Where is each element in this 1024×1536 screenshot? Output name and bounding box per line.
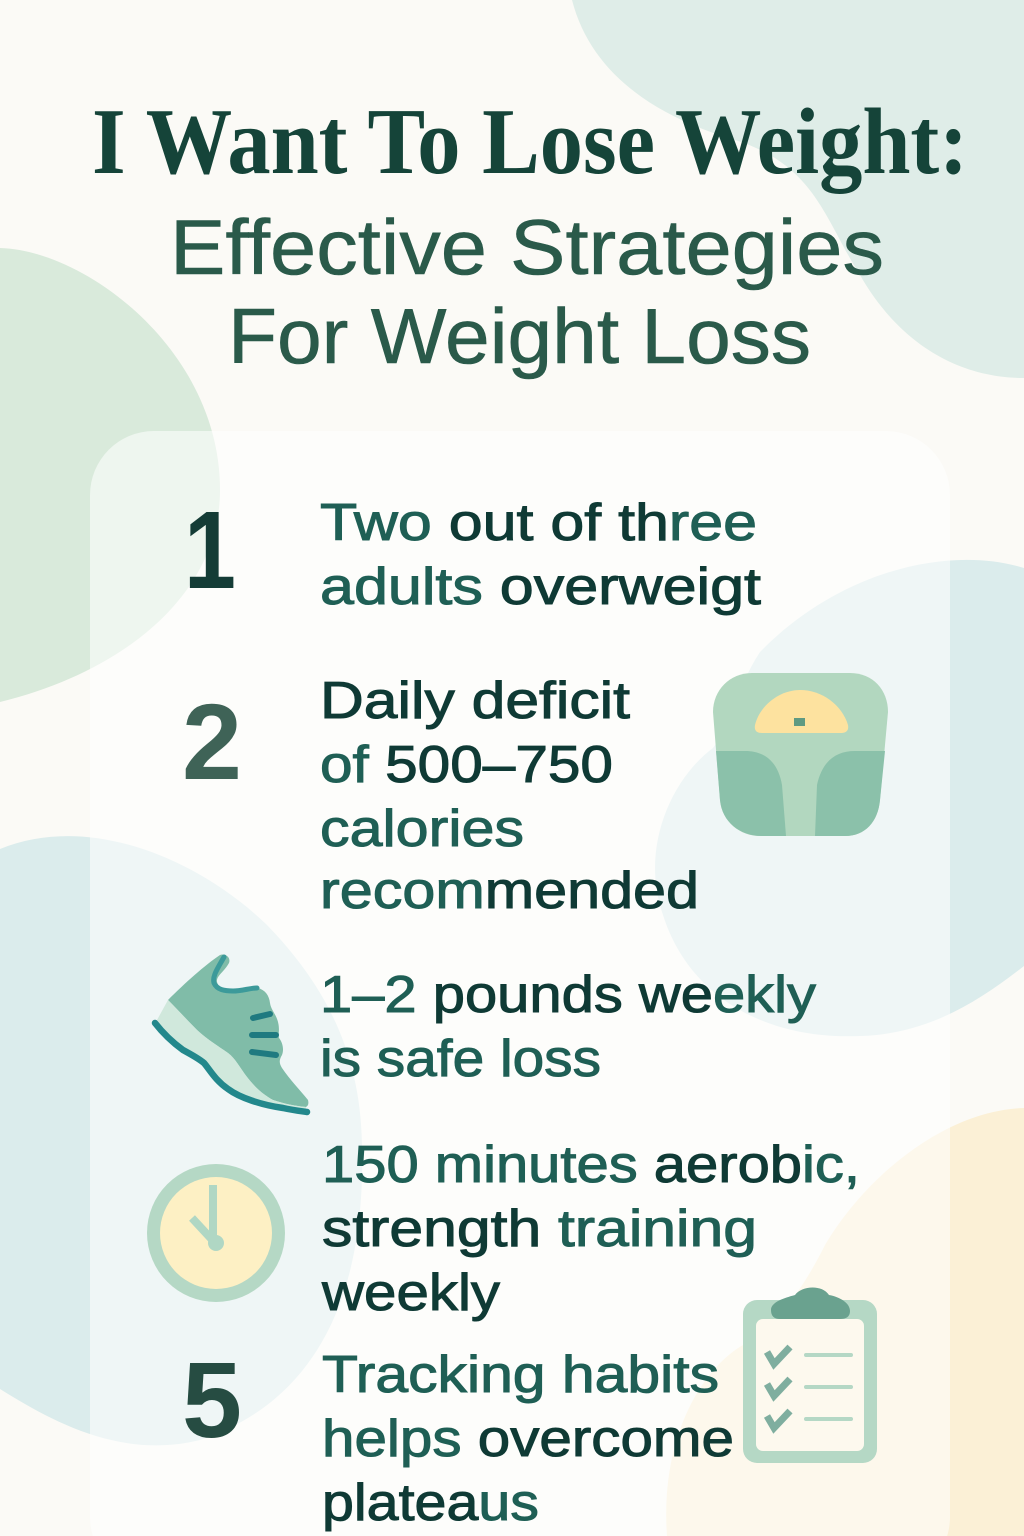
item 1 number: 1 bbox=[184, 489, 236, 612]
item 5 number: 5 bbox=[182, 1339, 242, 1460]
icon: bathroom scale bbox=[713, 673, 888, 836]
item 5 text: Tracking habits bbox=[322, 1346, 719, 1404]
item 4 text: 150 minutes aerob ic, bbox=[322, 1136, 860, 1194]
item 5 text bbox=[322, 1346, 734, 1532]
item 4 text: strength training bbox=[322, 1200, 757, 1258]
item 2 number: 2 bbox=[182, 681, 242, 802]
icon: clipboard checklist bbox=[743, 1287, 877, 1463]
item 2 text: of 500–750 bbox=[320, 736, 613, 794]
item 3 text: 1–2 pounds we ekly bbox=[320, 966, 816, 1024]
subtitle: Effective Strategies bbox=[170, 203, 884, 291]
panel: content card bbox=[90, 431, 950, 1536]
item 2 text: recom mended bbox=[320, 862, 699, 920]
item 2 text: calories bbox=[320, 800, 524, 858]
item 1 text: Two out of th ree bbox=[320, 494, 757, 552]
item 5 text: helps overcome bbox=[322, 1410, 734, 1468]
item 1 text bbox=[320, 494, 762, 616]
item 5 text: platea us bbox=[322, 1474, 539, 1532]
item 4 text: weekly bbox=[321, 1264, 500, 1322]
item 3 text bbox=[320, 966, 816, 1088]
item 3 text: is safe loss bbox=[320, 1030, 601, 1088]
icon: running shoe bbox=[155, 955, 308, 1112]
item 4 text bbox=[321, 1136, 860, 1322]
subtitle bbox=[170, 203, 884, 380]
icon: clock bbox=[147, 1164, 285, 1302]
title: I Want To Lose Weight: bbox=[92, 90, 968, 194]
item 1 text: adults overweigt bbox=[320, 558, 762, 616]
item 2 text: Daily deficit bbox=[320, 672, 631, 730]
subtitle: For Weight Loss bbox=[228, 292, 811, 380]
item 2 text bbox=[320, 672, 699, 920]
